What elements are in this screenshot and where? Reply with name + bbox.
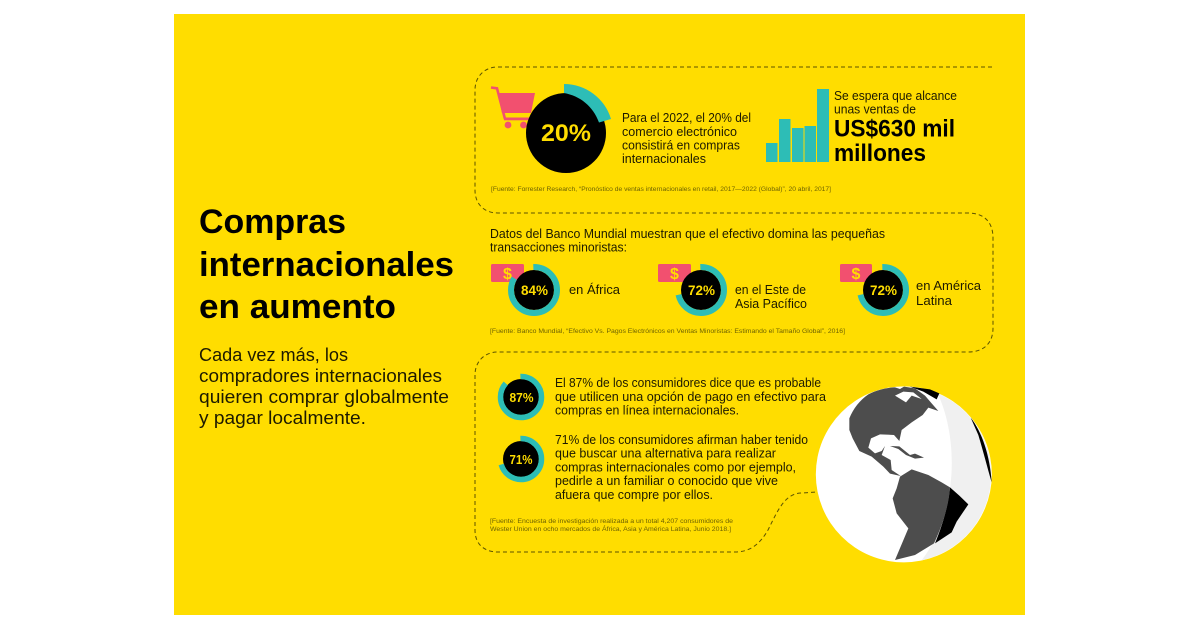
bar chart: sales growth bbox=[766, 89, 829, 162]
intro text: y pagar localmente. bbox=[199, 408, 366, 428]
left intro block bbox=[199, 203, 454, 428]
callout: US$630 mil millones: Se espera que alcance bbox=[834, 89, 957, 103]
intro text bbox=[199, 345, 449, 428]
stat: 72% Latin America bbox=[840, 264, 981, 313]
source note: [Fuente: Forrester Research, “Pronóstico de ventas internacionales en retail, 2017—2022 (Global)”, 20 abril, 2017] bbox=[491, 186, 831, 193]
source note: Wester Union en ocho mercados de África, Asia y América Latina, Junio 2018.] bbox=[490, 524, 731, 533]
stat: 87% bbox=[500, 376, 542, 418]
stat: 72% East Asia Pacific: 72% bbox=[688, 283, 715, 298]
heading text: Datos del Banco Mundial muestran que el efectivo domina las pequeñas bbox=[490, 227, 885, 241]
text: 2022 forecast: consistirá en compras bbox=[622, 138, 740, 152]
stat: 71% bbox=[500, 438, 542, 480]
icon: globe bbox=[816, 386, 992, 562]
heading text: transacciones minoristas: bbox=[490, 241, 627, 255]
stat: 72% East Asia Pacific: Asia Pacífico bbox=[735, 297, 807, 311]
title: en aumento bbox=[199, 288, 396, 326]
stat: 72% East Asia Pacific: en el Este de bbox=[735, 283, 806, 297]
text: 71%: 71% de los consumidores afirman haber tenido bbox=[555, 433, 808, 447]
stat: 72% East Asia Pacific bbox=[658, 264, 807, 313]
donut chart: 20%: 20% bbox=[541, 120, 591, 147]
stat: 72% East Asia Pacific: $ bbox=[670, 266, 679, 283]
source note: [Fuente: Banco Mundial, “Efectivo Vs. Pagos Electrónicos en Ventas Minoristas: Estimando el Tamaño Global”, 2016] bbox=[490, 328, 845, 335]
intro text: Cada vez más, los bbox=[199, 345, 348, 365]
yellow poster background bbox=[174, 14, 1025, 615]
panel: e-commerce forecast bbox=[491, 84, 957, 193]
text: 87%: El 87% de los consumidores dice que es probable bbox=[555, 376, 821, 390]
text: 2022 forecast: Para el 2022, el 20% del bbox=[622, 111, 751, 125]
stat: 71%: 71% bbox=[510, 453, 532, 467]
text: 87%: compras en línea internacionales. bbox=[555, 404, 739, 418]
text: 2022 forecast: internacionales bbox=[622, 152, 706, 166]
dashed connector path bbox=[475, 67, 993, 552]
text: 2022 forecast: comercio electrónico bbox=[622, 125, 737, 139]
panel: cash dominance bbox=[490, 227, 981, 335]
stat: 72% Latin America: 72% bbox=[870, 283, 897, 298]
intro text: quieren comprar globalmente bbox=[199, 387, 449, 407]
stat: 84% Africa: en África bbox=[569, 282, 620, 297]
title bbox=[199, 203, 454, 326]
text: 71%: afuera que compre por ellos. bbox=[555, 488, 713, 502]
stat: 84% Africa: 84% bbox=[521, 283, 548, 298]
icon: shopping cart bbox=[491, 88, 535, 128]
text: 87%: que utilicen una opción de pago en efectivo para bbox=[555, 390, 826, 404]
intro text: compradores internacionales bbox=[199, 366, 442, 386]
stat: 72% Latin America: Latina bbox=[916, 294, 952, 308]
stat: 72% Latin America: en América bbox=[916, 279, 981, 293]
callout: US$630 mil millones bbox=[834, 89, 957, 167]
text: 87% bbox=[555, 376, 826, 418]
donut chart: 20% bbox=[526, 84, 611, 173]
title: Compras bbox=[199, 203, 346, 241]
panel: consumer survey bbox=[490, 376, 826, 533]
stat: 87%: 87% bbox=[510, 391, 534, 405]
callout: US$630 mil millones: millones bbox=[834, 140, 926, 167]
stat: 84% Africa: $ bbox=[503, 266, 512, 283]
text: 71% bbox=[555, 433, 808, 502]
text: 71%: que buscar una alternativa para realizar bbox=[555, 447, 776, 461]
source note: [Fuente: Encuesta de investigación realizada a un total 4,207 consumidores de bbox=[490, 518, 733, 525]
text: 71%: compras internacionales como por ejemplo, bbox=[555, 460, 796, 474]
stat: 72% Latin America: $ bbox=[852, 266, 861, 283]
callout: US$630 mil millones: unas ventas de bbox=[834, 102, 916, 116]
callout: US$630 mil millones: US$630 mil bbox=[834, 116, 955, 142]
text: 71%: pedirle a un familiar o conocido que vive bbox=[555, 474, 778, 488]
source note bbox=[490, 518, 733, 533]
stat: 84% Africa bbox=[491, 264, 620, 313]
title: internacionales bbox=[199, 246, 454, 284]
heading text bbox=[490, 227, 885, 255]
text: 2022 forecast bbox=[622, 111, 751, 166]
